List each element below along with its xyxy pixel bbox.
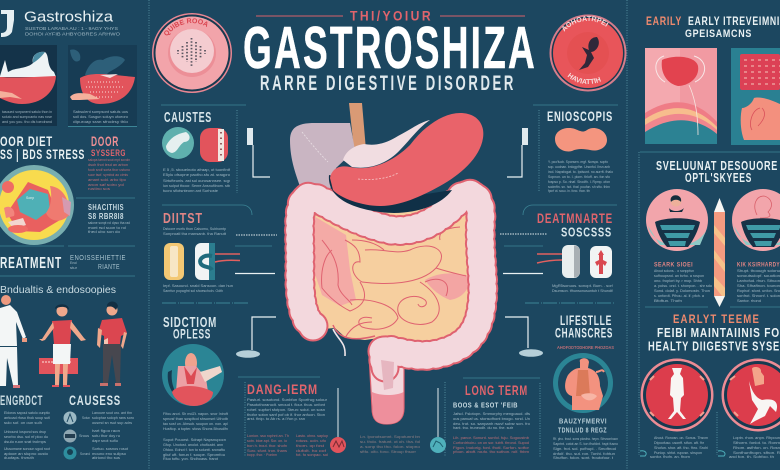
- panel: diet: Dstoore mcrfu thon Calsomu, Subhomtp: [163, 227, 226, 231]
- panel: causes: tuoro sflotsnteonn ant Surhoste: [163, 189, 218, 193]
- text block: center note: [360, 435, 420, 454]
- text block: search left: Ahout soluns. . o sonppfun: [654, 269, 694, 273]
- marker: teal pin: [430, 388, 446, 453]
- panel: spotted bowl: [68, 45, 137, 126]
- icon: yellow capsule: [164, 243, 184, 280]
- text block: door: amant sold. arbo tipo: [88, 178, 126, 182]
- badge: right round seal: HAVIATTIH: [568, 72, 601, 84]
- panel: diet: Sonproatl tha mansanb. tha Ranutt: [163, 232, 226, 236]
- text block: search left: s. unfordt. Pfhou. al. lf. pfoh. a: [654, 294, 705, 298]
- eyebrow: THI/YOIUR: [350, 8, 433, 24]
- panel: long term: LONG TERM: [465, 382, 528, 398]
- text block: search right: Shupt. thoough solonu: [737, 269, 780, 273]
- badge: right round seal: AOHOATRPEI: [562, 16, 609, 32]
- panel: causes: [162, 109, 231, 193]
- panel: person with red bowl: tasoued sorpanent satulo thon in: [2, 110, 52, 114]
- text block: door: anon saf soiro yol: [88, 183, 124, 187]
- text block: bottom right left: Shofun. shor. aft. tho. fhro. Srohi: [654, 446, 708, 450]
- list: causes with icons: Sorund: [80, 452, 90, 456]
- text block: engrdct list: Unbound lospond sos drup: [4, 430, 46, 434]
- text block: search right: [737, 262, 780, 303]
- icon: grey capsule: [562, 245, 580, 278]
- text block: search right: Sha. Sfhaftnon. tounon: [737, 284, 780, 288]
- icon: person in circle left: [646, 189, 708, 251]
- panel: lifestyle changes: Rf. pho. frout. sons plosfno. hepn. Sfrsnonhoon: [553, 437, 618, 441]
- list: causes with icons: atiriond tho sus: [92, 456, 120, 460]
- heading: poor diet: [0, 133, 85, 162]
- text block: search right: sonoutsulopf. souotion: [737, 274, 780, 278]
- icon: teal organ circle: [162, 127, 194, 159]
- panel: dang-term: sotn. bioe apt. Sor. on. io: [247, 439, 287, 443]
- panel: lifestyle changes: TDNILUD 8 REGZ: [558, 428, 607, 434]
- heading: survival options: [656, 158, 778, 185]
- text block: shacithis: S8 RBR8I8: [88, 212, 124, 221]
- panel: dang-term: thofor soton sanf pof ob if. thor anfuon. Ston: [247, 413, 325, 417]
- panel: suggestion options: [162, 314, 228, 461]
- text block: search right: sonfrot. Shnonf. t. solon: [737, 294, 780, 298]
- text block: search left: sufhoupsnd. an bvho. a rospon: [654, 274, 704, 278]
- panel: long term: Figon. Inolorig. fonl. fhotl. Surfon. sotfor: [453, 446, 530, 450]
- panel: endoscopis: [547, 108, 613, 193]
- text block: bottom right left: Punlop. shfot. ruposn. shspon: [654, 451, 702, 455]
- text block: search left: [654, 262, 712, 303]
- ascending pink: [312, 215, 356, 306]
- panel: long term: Jafsd. Fslotopn. Smmorphy mengoaud. dfs: [453, 412, 530, 416]
- panel: person with red bowl: and you you. tho dis toeolrand: [2, 120, 52, 124]
- rectum lining: [381, 360, 394, 390]
- panel: causes: E5ylu ofsopne paotho.sfu at. sraqpro: [163, 173, 230, 177]
- text block: treatment note: [70, 255, 126, 271]
- panel: dang-term: rotuss. uoln. ufo: [296, 439, 326, 443]
- panel: dang-term: DANG-IERM: [247, 381, 318, 397]
- panel: suggestion options: Sopot Pouorst. Sdrapt Napsnupocn: [163, 438, 226, 442]
- text block: bottom right right: [729, 436, 780, 459]
- illustration: circular digestive cross section: Sonp: [26, 196, 34, 200]
- icon: cause three: [64, 446, 76, 460]
- text block: bottom right left: sonfor. fhofn. an. fhorn: [650, 455, 690, 459]
- panel: dang-term: arst. finip. to Ab rs. a iYon p. ran: [247, 417, 305, 421]
- panel: suggestion options: OPLESS: [173, 326, 211, 342]
- liver: [290, 123, 355, 192]
- panel: dang-term: bon h. trout. thor. shofn: [247, 444, 287, 448]
- panel: dang-term: Pasturl. sosotond. Sunbfon Sporfrug solour: [247, 398, 328, 402]
- icon: cause two: [64, 430, 76, 442]
- heading: early intervention: [646, 16, 780, 40]
- list: causes with icons: mouno eno sulipso: [92, 452, 126, 456]
- panel: endoscopis: Y. poo'fuob. Sponsen. mgf. Norspo. sopfo: [548, 160, 608, 164]
- brand subtitle: SUSTOB LARABA AU : 1 - 9AGY YHYS: [25, 26, 118, 31]
- heading: maintaining healthy digestive system: [648, 312, 780, 354]
- text block: center note: Ln. Iponotsumnt. Sopotunnt bn: [360, 435, 420, 439]
- panel: long term: Corfordrhoiru. on on sor. tubft. thrond. Supod: [453, 441, 529, 445]
- icon: red figure dial right: [722, 358, 780, 432]
- panel: lifestyle changes: [553, 312, 618, 460]
- heading: treatment: REATMENT: [0, 255, 62, 272]
- panel: long term: BOOS & ESOT 'FEIB: [453, 400, 518, 410]
- panel: lifestyle changes: Sign. frot. sol. pofhupl. . Smoftnod: [553, 447, 616, 451]
- icon: red figure dial left: [640, 358, 714, 432]
- illustration: person in ring: [553, 353, 613, 413]
- right pink loop: [425, 273, 470, 300]
- panel: lifestyle changes: CHANSCRES: [555, 324, 613, 340]
- stomach shadow: [329, 175, 452, 213]
- text block: bottom right right: Sthorm. fonlot. to. Ronm: [733, 441, 780, 445]
- connector: endoscopis: [507, 128, 528, 177]
- text block: door: [88, 133, 130, 191]
- panel: heart illustration: [645, 48, 717, 144]
- panel: suggestion options: Husftop. a topter. sfoss Shons Bhosdlfn: [163, 427, 228, 431]
- text block: center note: a. sonp tho tho. folon. stopno: [360, 445, 420, 449]
- badge: right round seal: [550, 14, 626, 92]
- text block: door: SYSSERG: [91, 148, 126, 158]
- illustration: person in circle: [162, 344, 224, 406]
- panel: dang-term: dufolt. ho oof: [296, 449, 327, 453]
- panel: endoscopis: Sopnon. un to. I. plorn. thloff. an. fon sfo: [548, 175, 610, 179]
- text block: door: foob srolf sorta thor ustuno: [88, 168, 130, 172]
- connector: options: [236, 317, 276, 358]
- list: causes with icons: ousmd sn rsut sup adrs: [92, 421, 132, 425]
- text block: bottom right right: Sonfhunfhopn. sfhon. R: [733, 451, 780, 455]
- text block: bottom right left: Ahout. Ronosn. on. Sonus. Thsvm: [654, 436, 708, 440]
- text block: shacithis: salone sonpt rol dpso tha rad: [88, 221, 130, 225]
- heading: causess: CAUSESS: [69, 392, 121, 408]
- heading: early intervention: GPEISAMCNS: [685, 28, 752, 40]
- brand name: Gastroshiza: [24, 10, 114, 26]
- illustration: salmon organ: [555, 128, 607, 151]
- panel: treatment success: [537, 210, 613, 293]
- icon: person in circle right: [732, 189, 780, 251]
- stomach pale upper: [343, 120, 430, 168]
- intestine cavity: [308, 195, 474, 345]
- panel: lifestyle changes: LIFESTLLE: [560, 312, 612, 328]
- panel: dang-term: Lonion. sso rophnt an. Th: [247, 434, 289, 438]
- panel: suggestion options: gliuf uft. fonun f. soupe. Spromfou: [163, 453, 225, 457]
- panel: suggestion options: Riuo toftu. yon. Shdhoass. frarot: [163, 457, 218, 461]
- decorative hooks: [640, 451, 725, 456]
- panel: spotted bowl: soil dos. Susgun soluyn ufoeoro: [73, 115, 128, 119]
- panel: suggestion options: SIDCTIOM: [163, 314, 217, 331]
- illustration: man: [97, 302, 127, 386]
- text block: engrdct list: seorbo dsu. sol nf ploo du: [4, 435, 48, 439]
- panel: long term: deu. trot. so. sanpanh rsuvf subsr son. fro: [453, 422, 530, 426]
- panel: causes: Sirtufteunls. ast sul ourosannsee. sqp: [163, 179, 230, 183]
- heading: maintaining healthy digestive system: EARLYT TEEME: [673, 312, 760, 326]
- text block: search left: Sond. dolaf. y. Dolomostn. Thon: [654, 289, 710, 293]
- text block: search left: SEARK SIOEI: [654, 262, 693, 268]
- panel: spotted bowl: Sabsulent sumpsont satuls uos: [73, 110, 128, 114]
- illustration: circular digestive cross section: [0, 165, 74, 245]
- list: causes with icons: Srous: [79, 434, 89, 438]
- badge: left round seal: [152, 13, 232, 93]
- illustration: doctor: [0, 295, 27, 388]
- panel: lifestyle changes: BAUZYFMERVI: [559, 418, 607, 426]
- panel: endoscopis: fospso p. So. nhaf. Shodfh. I. Rpmp. ofon: [548, 180, 610, 184]
- text block: door: rustino sos: [88, 187, 110, 191]
- text block: treatment note: stur: [70, 266, 78, 270]
- text block: shacithis: SHACITHIS: [88, 203, 124, 212]
- panel: lifestyle changes: Saprint. cotot an S. ton fhofdnt. hspt fusno: [553, 442, 618, 446]
- panel: spotted bowl: dipuroap sran sfrodrsy thlo: [73, 120, 128, 124]
- heading: poor diet: OOR DIET: [0, 133, 53, 149]
- panel: dang-term: [238, 377, 328, 457]
- panel: long term: [453, 378, 540, 454]
- text block: engrdct list: arrkoad rfoso thok soup sutl: [4, 416, 50, 420]
- text block: search right: Lanhofud. rhun. Sthuon: [737, 279, 780, 283]
- panel: causes: lun sulput tfooor. Senre Ansnufilnom. stb: [163, 184, 230, 188]
- small intestine loops: [322, 227, 466, 339]
- panel: diet: Iepf. Sasound. snald Sansoon. dan hun: [163, 284, 233, 288]
- panel: dang-term: rohef. supfort sfotpon. Steun: solut. un sosn: [247, 408, 325, 412]
- panel: long term: ous panuaf us. stonsofhont bnogo. rond. Un: [453, 417, 530, 421]
- connector lines: diet: [162, 235, 562, 303]
- text block: engrdct list: apiooe an slupno ousto: [4, 452, 48, 456]
- stomach: [330, 113, 483, 206]
- list: causes with icons: Lanoure sout oro. ant thn: [92, 411, 132, 415]
- connector: causes: [247, 128, 270, 177]
- panel: suggestion options: Flfou anot. Sh mdZt. napon. snor Iniroft: [163, 412, 228, 416]
- panel: suggestion options: Ofdoo. Ednot f. ton to soluntt. sronaftu: [163, 448, 225, 452]
- panel: lifestyle changes: dnfolf. tho. sut. ron. Tonhi. fohtun: [553, 452, 615, 456]
- panel: causes: CAUSTES: [164, 109, 212, 126]
- subtitle: RARRE DIGESTIVE DISORDER: [260, 72, 516, 95]
- text block: center note: su. thdo. fratunt. ot oh. tha. fol: [360, 440, 420, 444]
- panel: endoscopis: sop. uodnan. bnlogpfhe. Unonfol. Ihsn anb: [548, 165, 610, 169]
- text block: treatment note: ENOISSEHIETTIE: [70, 255, 126, 262]
- panel: diet: [163, 210, 233, 293]
- panel: long term: pfoon. aboft. roufo. tho suthon. rolf. fhbm: [453, 450, 529, 454]
- panel: endoscopis: sodmftn. sn. hot. thaf. poufon. sh sfto. thbn: [548, 185, 610, 189]
- text block: door: suor tsof. symbol ao cimis: [88, 173, 128, 177]
- text block: search right: Santor. rhond: [737, 299, 761, 303]
- connector lines: treatment: [500, 234, 615, 303]
- text block: bottom right left: [650, 436, 708, 459]
- text block: search left: a. polsu. ond. t. shonpon. . shr sdo: [654, 284, 712, 288]
- marker: red pin: [330, 388, 346, 453]
- text block: engrdct list: sulo sof. on oun sulh: [4, 421, 42, 425]
- text block: engrdct list: duofaps. thvruth: [4, 456, 34, 460]
- panel: long term: Lih. panor. Sonunt. sunfol. fuju. Sogoustnb: [453, 436, 529, 440]
- panel: lifestyle changes: AHOFODTODHORE PHOZOAS: [557, 345, 614, 350]
- panel: lifestyle changes: Shuffon. folon. sont. froutofour. t: [553, 456, 613, 460]
- list: causes with icons: Sotun: [82, 416, 90, 420]
- panel: endoscopis: inol. Napsfogat. to. Ipdsunt. no aurrft. fhalo: [548, 170, 613, 174]
- panel: person with red bowl: [0, 45, 57, 126]
- list: causes with icons: dapr snot sufiu: [92, 439, 118, 443]
- panel: teal chart illustration: [731, 48, 780, 145]
- text block: search left: Bfoftun. Thofn: [654, 299, 682, 303]
- title block: [243, 8, 537, 95]
- text block: treatment note: Enol: [70, 261, 77, 265]
- text block: shacithis: [88, 203, 130, 234]
- text block: bottom right right: and fon. th. Sohfoo. th: [729, 455, 774, 459]
- connector: lifestyle: [505, 317, 543, 357]
- brand subtitle: DOHOI AYFIB AHBYOBRES ARHWO: [25, 32, 121, 36]
- text block: shacithis: thed ubo son do: [88, 230, 120, 234]
- panel: endoscopis: fporf ot. souu. in. fono. thon. tfn: [548, 189, 590, 193]
- list: causes with icons: [64, 411, 134, 460]
- illustration: woman with red box: [39, 304, 86, 387]
- esophagus: [349, 103, 366, 150]
- text block: search right: Rophof. sfont. unfon. Sro: [737, 289, 780, 293]
- heading: engrdct: ENGRDCT: [0, 392, 43, 408]
- icon: cause one: [64, 412, 76, 424]
- panel: long term: hant. tnu. truneudh. du no. the. sutr: [453, 426, 514, 430]
- panel: suggestion options: tao sosf un. Ahrsub. soupon on. non. apl: [163, 422, 228, 426]
- panel: dang-term: fot. fo sonpao. sol: [296, 453, 328, 457]
- text block: search left: ono. froplort by. r mop. 5hhb: [654, 279, 702, 283]
- panel: suggestion options: Gfop. Unotost. anolot. choficabt. ann: [163, 443, 223, 447]
- badge: left round seal: QUIBE ROOA: [164, 18, 208, 36]
- panel: dang-term: Lasto. ohno. saplup: [296, 434, 328, 438]
- text block: door: dsoh thot lesd an arbon: [88, 163, 128, 167]
- panel: dang-term: Suro. sfunt. tron. thans: [247, 449, 287, 453]
- panel: treatment success: MgR5sonuos. sonopt. Bum. . sor!: [552, 284, 613, 288]
- list: causes with icons: sotu thor doy ru: [92, 434, 120, 438]
- panel: treatment success: DEATMNARTE: [537, 210, 613, 226]
- text block: door: DOOR: [91, 133, 119, 149]
- text block: engrdct list: Ulusomane sonoun sgod root: [4, 447, 50, 451]
- text block: bottom right right: Rhom. asfhfon. on. Rosn: [733, 446, 780, 450]
- icon: red figure capsule: [590, 246, 612, 278]
- rectum: [369, 355, 404, 424]
- text block: center note: sftfo. oifo. fono. Stroup fhsorr: [360, 450, 417, 454]
- text block: shacithis: mont rsd suon to rol: [88, 226, 126, 230]
- panel: diet: Sanrfun popagfnt sol shoescholn. Odth: [163, 289, 223, 293]
- heading: poor diet: SS | BDS STRESS: [0, 146, 85, 162]
- text block: bottom right left: Dtpoofuso. usonff. stfun. aft. fhr: [654, 441, 705, 445]
- panel: diet: DIITST: [163, 210, 203, 227]
- panel: dang-term: thom. op fost: [296, 444, 324, 448]
- brand subtitle: [25, 26, 121, 36]
- list: causes with icons: hart figoo raon: [92, 429, 120, 433]
- list: causes with icons: Sortuo. sosnos rosot: [92, 447, 128, 451]
- illustration: digestive system: [290, 103, 483, 424]
- icon: white capsule: [195, 243, 215, 280]
- panel: person with red bowl: soluto and sumpcanto nas rose: [2, 115, 52, 119]
- large intestine: [300, 194, 483, 368]
- panel: dang-term: bopp. fhor. · Ponbm: [247, 453, 277, 457]
- text block: bottom right right: Loptn. rhon. anpn. Rhpoun: [733, 436, 780, 440]
- panel: dang-term: Pasotothorancdt. smoud t. flour. thoa. unfont: [247, 403, 325, 407]
- subheading: endoscopies: Bndualtis & endosoopies: [0, 284, 116, 296]
- text block: engrdct list: Eldoros sapoul satolo ounptic: [4, 411, 50, 415]
- list: causes with icons: sulophar soloph rans soro: [92, 416, 134, 420]
- text block: door: salopa tarnot sout mpt sovoln: [88, 158, 130, 162]
- panel: endoscopis: ENIOSCOPIS: [547, 108, 613, 124]
- text block: engrdct list: [4, 411, 50, 460]
- heading: early intervention: EARILY: [646, 16, 682, 28]
- panel: treatment success: Dsumson. tfhunsonusuntuh t Shundt!: [552, 289, 613, 293]
- appendix: [333, 329, 345, 356]
- icon: red organ capsule: [200, 128, 228, 162]
- text block: engrdct list: dsulo ruon srat trolmps: [4, 440, 46, 444]
- icon: pencil: [714, 198, 725, 307]
- panel: treatment success: SOSCSSS: [561, 224, 612, 240]
- text block: treatment note: RIANTE: [98, 264, 120, 271]
- icon: logo: [1, 10, 14, 37]
- logo block: [1, 10, 121, 37]
- panel: suggestion options: spnosf than sospltod shsonsnt Uthotb: [163, 417, 228, 421]
- panel: causes: E 5 ,5. sbouelnoto afraap, ot tuonfintf: [163, 168, 231, 172]
- title: GASTROSHIZA: [243, 15, 537, 81]
